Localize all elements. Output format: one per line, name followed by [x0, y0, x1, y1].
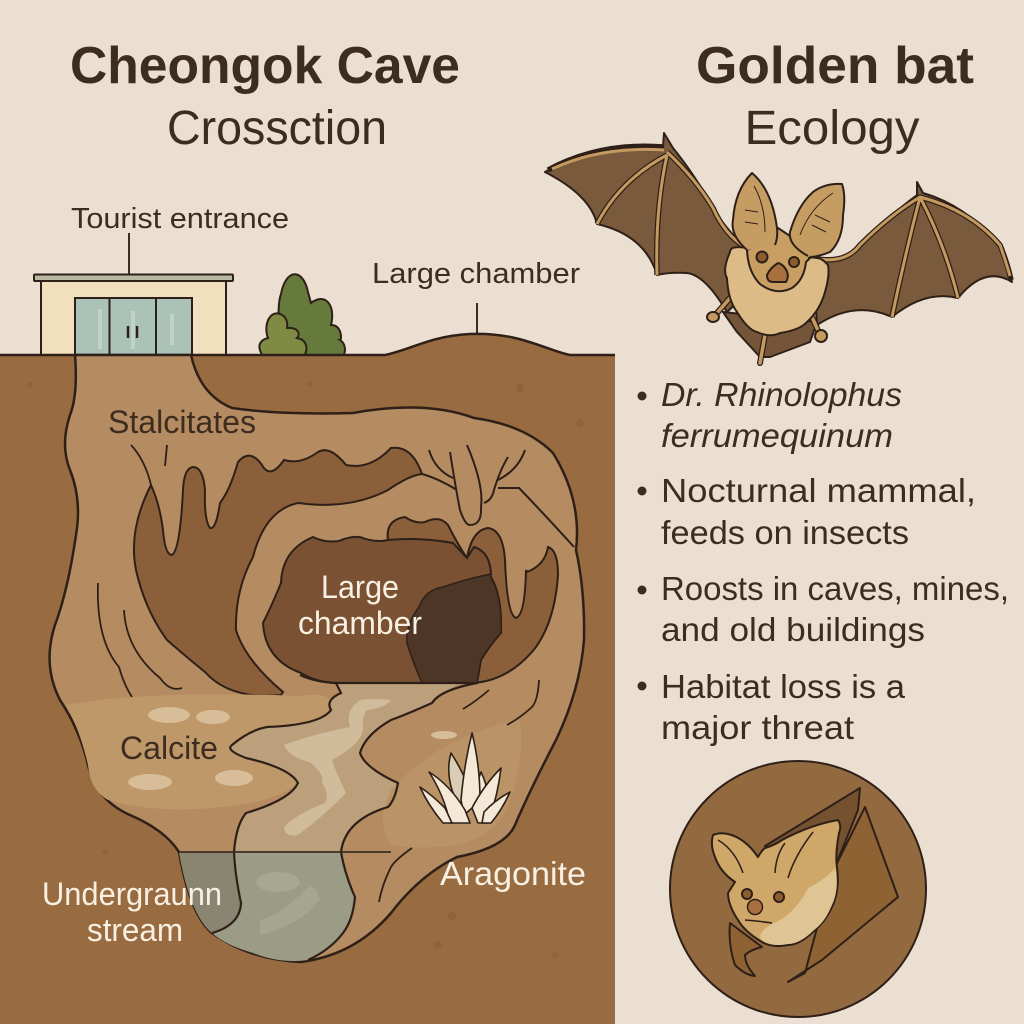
building: tourist entrance [34, 274, 233, 356]
neck fur [760, 868, 837, 945]
ground [0, 334, 615, 1024]
darkest recess [407, 574, 501, 683]
water pool [179, 852, 355, 961]
label: Large chamber (inside): Large [321, 569, 399, 605]
bullet: roosts: and old buildings [661, 611, 925, 648]
label: Aragonite: Aragonite [440, 855, 586, 892]
ground speckles [27, 381, 584, 958]
heading: Golden bat Ecology: Ecology [744, 102, 920, 155]
illustration: flying bat [545, 133, 1012, 363]
illustration: roosting bat medallion [670, 761, 926, 1017]
stalactite lines left [131, 445, 167, 485]
heading: Cheongok Cave Crossction: Cheongok Cave [70, 37, 460, 95]
bullet: species: ferrumequinum [661, 417, 893, 454]
upper dark chamber [134, 448, 422, 696]
bullet: habitat [638, 668, 906, 746]
bullet: nocturnal [638, 472, 976, 551]
hanging stalactite lines right [422, 445, 574, 547]
bullet: nocturnal: feeds on insects [661, 514, 909, 551]
icon: bush [259, 274, 345, 356]
label: Undergraunn stream: Undergraunn [42, 876, 222, 912]
outer cave passage [50, 355, 584, 962]
eyes [756, 252, 768, 262]
head and ears [712, 820, 840, 946]
bullet: habitat: Habitat loss is a [661, 668, 906, 705]
bullet: species: Dr. Rhinolophus [661, 376, 902, 413]
panel: cave cross-section [0, 334, 615, 1024]
label: Undergraunn stream: stream [87, 912, 183, 948]
tail membrane [723, 312, 817, 357]
bullet: nocturnal: Nocturnal mammal, [661, 472, 976, 509]
front wing [788, 807, 898, 982]
label: Large chamber (inside): chamber [298, 605, 422, 641]
legs and feet [717, 298, 820, 363]
right ear [790, 184, 844, 256]
bullet: roosts [638, 570, 1009, 648]
label: Large chamber (inside) [298, 569, 422, 641]
body fur [725, 247, 829, 335]
right wing [813, 182, 1012, 325]
head [747, 228, 812, 291]
label: Undergraunn stream [42, 876, 222, 948]
heading: Golden bat Ecology [696, 37, 974, 155]
underground river [230, 683, 460, 852]
river highlight [284, 699, 391, 836]
calcite highlights [128, 707, 457, 790]
calcite terrace [66, 694, 331, 809]
label: Tourist entrance: Tourist entrance [71, 203, 289, 235]
bullet: roosts: Roosts in caves, mines, [661, 570, 1009, 607]
label: Calcite: Calcite [120, 730, 218, 766]
ear detail [718, 832, 813, 878]
bullet: habitat: major threat [661, 709, 854, 746]
icon: aragonite crystal [420, 733, 510, 823]
large chamber [263, 537, 501, 683]
river banks and waterline [212, 675, 341, 933]
label: Stalcitates: Stalcitates [108, 404, 256, 440]
root lines [98, 583, 182, 697]
nose [767, 263, 788, 282]
bullet list: bat facts [638, 376, 1009, 746]
aragonite light floor [383, 720, 521, 848]
back wing [765, 788, 860, 900]
heading: Cheongok Cave Crossction: Crossction [167, 102, 387, 155]
left ear [733, 173, 777, 250]
heading: Golden bat Ecology: Golden bat [696, 37, 974, 95]
left flap [730, 923, 762, 976]
label: Large chamber (surface): Large chamber [372, 258, 580, 290]
right dark chamber [388, 517, 558, 683]
heading: Cheongok Cave Crossction [70, 37, 460, 155]
bullet: species [638, 376, 902, 454]
left wing [545, 133, 745, 312]
